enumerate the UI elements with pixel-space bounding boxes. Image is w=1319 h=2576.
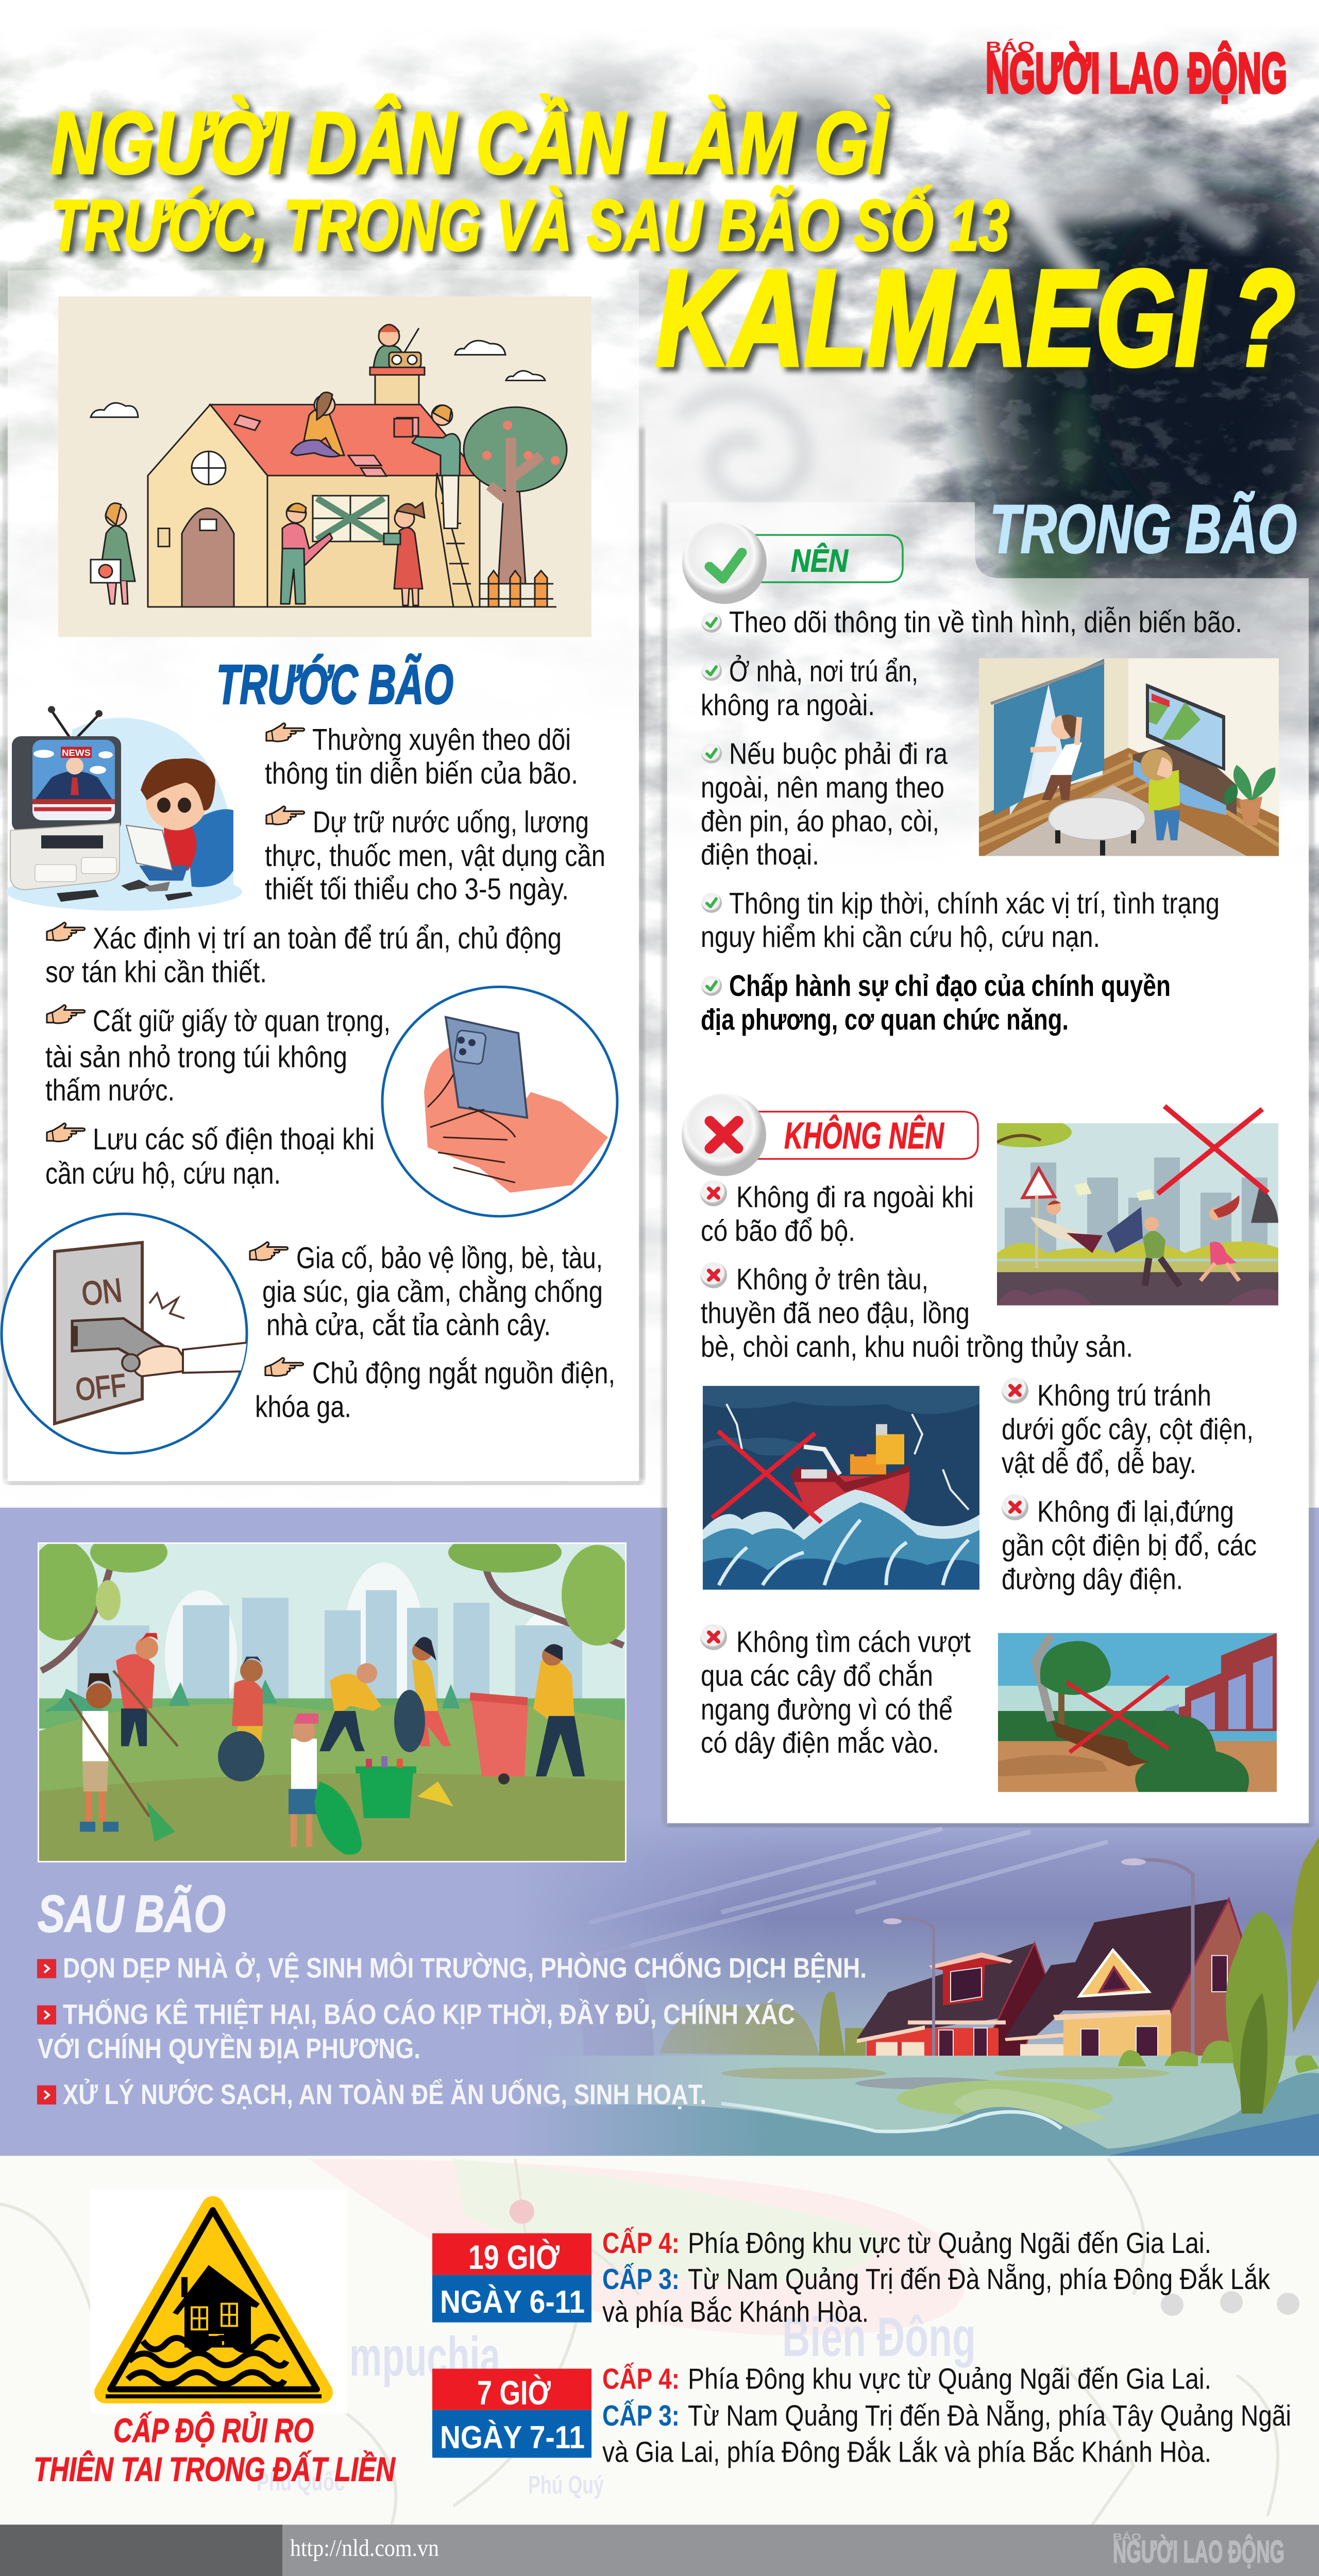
- item: save numbers: Lưu các số điện thoại khi: [93, 1122, 375, 1156]
- storm cloud satellite background: [0, 0, 1319, 1510]
- list: after the storm: [37, 1952, 867, 2110]
- risk text: second period: CẤP 3:: [602, 2399, 680, 2432]
- child with green bag: [289, 1714, 362, 1855]
- figure: woman with first aid kit: [91, 503, 135, 604]
- item: keep documents: [45, 1004, 391, 1107]
- item: damage report: [38, 1998, 795, 2064]
- item: obey authorities: Chấp hành sự chỉ đạo của chính quyền: [729, 970, 1171, 1003]
- list: should not do, group one: [700, 1180, 1133, 1363]
- item: no shelter under trees: dưới gốc cây, cột điện,: [1002, 1413, 1254, 1446]
- panel: during the storm: [663, 491, 1313, 1827]
- volunteer in yellow pants: [218, 1656, 264, 1782]
- item: cut power: khóa ga.: [255, 1389, 351, 1423]
- item: avoid fallen poles: gần cột điện bị đổ, các: [1002, 1529, 1257, 1562]
- list: before the storm, group two: [250, 1241, 615, 1423]
- risk text: first period: và phía Bắc Khánh Hòa.: [602, 2296, 869, 2329]
- item: stay home: [701, 654, 918, 722]
- item: reinforce: [262, 1241, 603, 1342]
- item: stock supplies: thực, thuốc men, vật dụng cần: [265, 839, 605, 873]
- title: [50, 94, 1295, 394]
- caption: natural disaster risk level: THIÊN TAI TRONG ĐẤT LIỀN: [33, 2450, 396, 2488]
- icon: pointing hand: [266, 806, 305, 824]
- icon: pointing hand: [265, 1358, 303, 1376]
- green recycling bin: [356, 1756, 416, 1818]
- item: stock supplies: Dự trữ nước uống, lương: [313, 805, 589, 839]
- item: reinforce: nhà cửa, cắt tỉa cành cây.: [266, 1308, 551, 1342]
- photo: ship in storm with red cross: [703, 1386, 979, 1590]
- heading: before the storm: TRƯỚC BÃO: [216, 654, 453, 716]
- item: obey authorities: địa phương, cơ quan chức năng.: [701, 1003, 1069, 1036]
- item: not on boats: bè, chòi canh, khu nuôi trồng thủy sản.: [701, 1330, 1133, 1363]
- item: safe shelter: Xác định vị trí an toàn để trú ẩn, chủ động: [93, 921, 562, 955]
- item: do not cross fallen trees: có dây điện mắc vào.: [701, 1726, 939, 1759]
- item: obey authorities: [701, 970, 1171, 1036]
- icon: check: [701, 893, 722, 913]
- item: not on boats: Không ở trên tàu,: [736, 1263, 928, 1296]
- illustration: power switch: OFF: [74, 1367, 128, 1407]
- footer url: http://nld.com.vn: [290, 2535, 439, 2562]
- item: no shelter under trees: Không trú tránh: [1037, 1379, 1211, 1412]
- item: stock supplies: thiết tối thiểu cho 3-5 ngày.: [265, 872, 569, 906]
- risk text: first period: Phía Đông khu vực từ Quảng Ngãi đến Gia Lai.: [688, 2227, 1211, 2260]
- item: avoid fallen poles: [1002, 1495, 1257, 1596]
- photo: fallen tree with red cross: [998, 1633, 1277, 1792]
- icon: pointing hand: [266, 723, 305, 741]
- figure: man on ladder: [394, 405, 460, 529]
- risk map section background: Biển Đông: [782, 2307, 976, 2368]
- time box: 7h, 7 Nov: NGÀY 7-11: [440, 2420, 585, 2455]
- volunteer bending in yellow shirt: [319, 1663, 381, 1751]
- icon: cross: [700, 1262, 727, 1288]
- item: stay home: Ở nhà, nơi trú ẩn,: [729, 654, 918, 688]
- illustration: child watching TV news: NEWS: [62, 748, 91, 758]
- item: timely info: Thông tin kịp thời, chính xác vị trí, tình trạng: [729, 887, 1220, 920]
- badge: should do: [682, 521, 903, 604]
- volunteer with rake, left: [70, 1673, 175, 1842]
- icon: check: [701, 660, 722, 681]
- illustration: hands holding phone: [382, 987, 617, 1216]
- list: should do: [701, 605, 1242, 1036]
- item: if going out: điện thoại.: [701, 838, 819, 871]
- risk map section background: mpuchia: [349, 2326, 501, 2388]
- title: NGƯỜI DÂN CẦN LÀM GÌ: [50, 94, 889, 192]
- icon: pointing hand: [250, 1242, 288, 1260]
- figure: woman on roof: [291, 392, 344, 456]
- icon: check: [701, 613, 722, 633]
- figure: man with radio on chimney: [374, 325, 421, 367]
- risk text: second period: [602, 2362, 1291, 2468]
- item: safe shelter: sơ tán khi cần thiết.: [45, 955, 267, 989]
- footer bar: [0, 2524, 1319, 2576]
- item: if going out: Nếu buộc phải đi ra: [729, 737, 948, 771]
- item: reinforce: gia súc, gia cầm, chằng chống: [262, 1274, 603, 1309]
- item: damage report: VỚI CHÍNH QUYỀN ĐỊA PHƯƠNG.: [38, 2033, 420, 2064]
- item: do not cross fallen trees: Không tìm cách vượt: [736, 1625, 971, 1659]
- item: do not cross fallen trees: [701, 1625, 971, 1759]
- icon: check: [701, 743, 722, 764]
- item: cut power: [255, 1356, 615, 1423]
- risk text: first period: [602, 2227, 1270, 2329]
- item: timely info: [701, 887, 1220, 954]
- item: clean up: DỌN DẸP NHÀ Ở, VỆ SINH MÔI TRƯỜNG, PHÒNG CHỐNG DỊCH BỆNH.: [63, 1952, 867, 1984]
- time box: 19h, 6 Nov: [432, 2233, 591, 2323]
- figure: man at window: [281, 503, 332, 604]
- logo: Báo Người Lao Động: BÁO: [986, 39, 1035, 56]
- list: should not do, group two: [700, 1377, 1257, 1759]
- red recycling bin: [470, 1692, 528, 1785]
- photo: people in strong wind with red cross: [979, 1106, 1278, 1306]
- volunteer pushing bin: [533, 1644, 585, 1776]
- risk map section background: Phú Quý: [528, 2471, 604, 2499]
- item: not on boats: thuyền đã neo đậu, lồng: [701, 1296, 970, 1330]
- lavender after-storm background: [0, 1507, 1319, 2156]
- figure: woman at window: [384, 503, 425, 605]
- item: do not go out: Không đi ra ngoài khi: [736, 1181, 974, 1214]
- icon: cross: [1002, 1377, 1028, 1403]
- item: keep documents: thấm nước.: [45, 1073, 175, 1107]
- item: follow news: thông tin diễn biến của bão.: [265, 756, 578, 790]
- item: clean water: XỬ LÝ NƯỚC SẠCH, AN TOÀN ĐỂ ĂN UỐNG, SINH HOẠT.: [63, 2078, 706, 2110]
- time box: 7h, 7 Nov: [432, 2369, 591, 2458]
- photo: cleaning up after the storm: [26, 1532, 634, 1862]
- footer logo: BÁO: [1113, 2531, 1141, 2543]
- item: timely info: nguy hiểm khi cần cứu hộ, cứu nạn.: [701, 921, 1100, 954]
- badge: should not do: KHÔNG NÊN: [784, 1115, 945, 1157]
- item: do not go out: có bão đổ bộ.: [701, 1214, 855, 1248]
- bullet icon: [37, 1959, 56, 1978]
- icon: cross: [700, 1180, 727, 1206]
- risk text: second period: Phía Đông khu vực từ Quảng Ngãi đến Gia Lai.: [688, 2363, 1211, 2395]
- item: not on boats: [701, 1263, 1133, 1363]
- icon: cross: [700, 1624, 727, 1650]
- volunteer with garbage bag: [394, 1637, 451, 1752]
- time box: 19h, 6 Nov: NGÀY 6-11: [440, 2284, 585, 2320]
- risk map section background: Phú Quốc: [257, 2468, 345, 2496]
- caption: natural disaster risk level: [33, 2412, 396, 2488]
- title: TRƯỚC, TRONG VÀ SAU BÃO SỐ 13: [50, 185, 1009, 265]
- bullet icon: [37, 2005, 56, 2024]
- item: if going out: đèn pin, áo phao, còi,: [701, 805, 939, 838]
- icon: cross: [1002, 1494, 1028, 1520]
- item: if going out: ngoài, nên mang theo: [701, 771, 944, 804]
- time box: 19h, 6 Nov: 19 GIỜ: [468, 2239, 560, 2277]
- icon: pointing hand: [47, 923, 85, 941]
- volunteer with rake, back: [113, 1633, 178, 1746]
- item: follow news: [265, 722, 578, 790]
- item: save numbers: cần cứu hộ, cứu nạn.: [45, 1156, 281, 1190]
- item: save numbers: [45, 1122, 375, 1190]
- item: do not cross fallen trees: qua các cây đổ chắn: [701, 1659, 933, 1692]
- illustration: power switch: [2, 1214, 247, 1453]
- item: stay home: không ra ngoài.: [701, 689, 875, 722]
- item: damage report: THỐNG KÊ THIỆT HẠI, BÁO CÁO KỊP THỜI, ĐẦY ĐỦ, CHÍNH XÁC: [63, 1998, 795, 2030]
- item: no shelter under trees: vật dễ đổ, dễ bay.: [1002, 1447, 1196, 1480]
- item: avoid fallen poles: Không đi lại,đứng: [1037, 1495, 1234, 1529]
- illustration: power switch: ON: [80, 1272, 124, 1312]
- risk map section background: [0, 2156, 1319, 2524]
- item: keep documents: tài sản nhỏ trong túi không: [45, 1040, 347, 1074]
- icon: pointing hand: [47, 1123, 85, 1142]
- item: do not cross fallen trees: ngang đường vì có thể: [701, 1693, 953, 1726]
- panel: before the storm: [2, 270, 644, 1485]
- illustration: family indoors watching typhoon news: [979, 658, 1279, 856]
- icon: flood warning sign: [90, 2190, 347, 2414]
- item: follow news: Thường xuyên theo dõi: [312, 722, 571, 756]
- list: before the storm, group one: [45, 722, 605, 1190]
- badge: should not do: [682, 1093, 978, 1176]
- illustration: flooded houses: [515, 1817, 1319, 2156]
- item: if going out: [701, 737, 948, 871]
- illustration: family preparing house: [58, 296, 591, 637]
- risk text: first period: CẤP 4:: [602, 2227, 680, 2260]
- icon: pointing hand: [47, 1005, 85, 1023]
- bullet icon: [37, 2086, 56, 2105]
- caption: natural disaster risk level: CẤP ĐỘ RỦI RO: [113, 2412, 314, 2450]
- risk text: first period: CẤP 3:: [602, 2263, 680, 2296]
- time box: 7h, 7 Nov: 7 GIỜ: [477, 2374, 551, 2412]
- risk text: second period: CẤP 4:: [602, 2362, 680, 2395]
- item: keep documents: Cất giữ giấy tờ quan trọng,: [93, 1004, 391, 1038]
- item: do not go out: [701, 1181, 974, 1248]
- item: avoid fallen poles: đường dây điện.: [1002, 1563, 1183, 1596]
- item: safe shelter: [45, 921, 562, 989]
- icon: check: [701, 976, 722, 996]
- item: cut power: Chủ động ngắt nguồn điện,: [312, 1356, 615, 1390]
- illustration: child watching TV news: [6, 706, 242, 911]
- badge: should do: NÊN: [791, 543, 849, 579]
- item: no shelter under trees: [1002, 1379, 1254, 1480]
- item: reinforce: Gia cố, bảo vệ lồng, bè, tàu,: [296, 1241, 603, 1275]
- item: stock supplies: [265, 805, 605, 906]
- heading: after the storm: SAU BÃO: [38, 1885, 226, 1943]
